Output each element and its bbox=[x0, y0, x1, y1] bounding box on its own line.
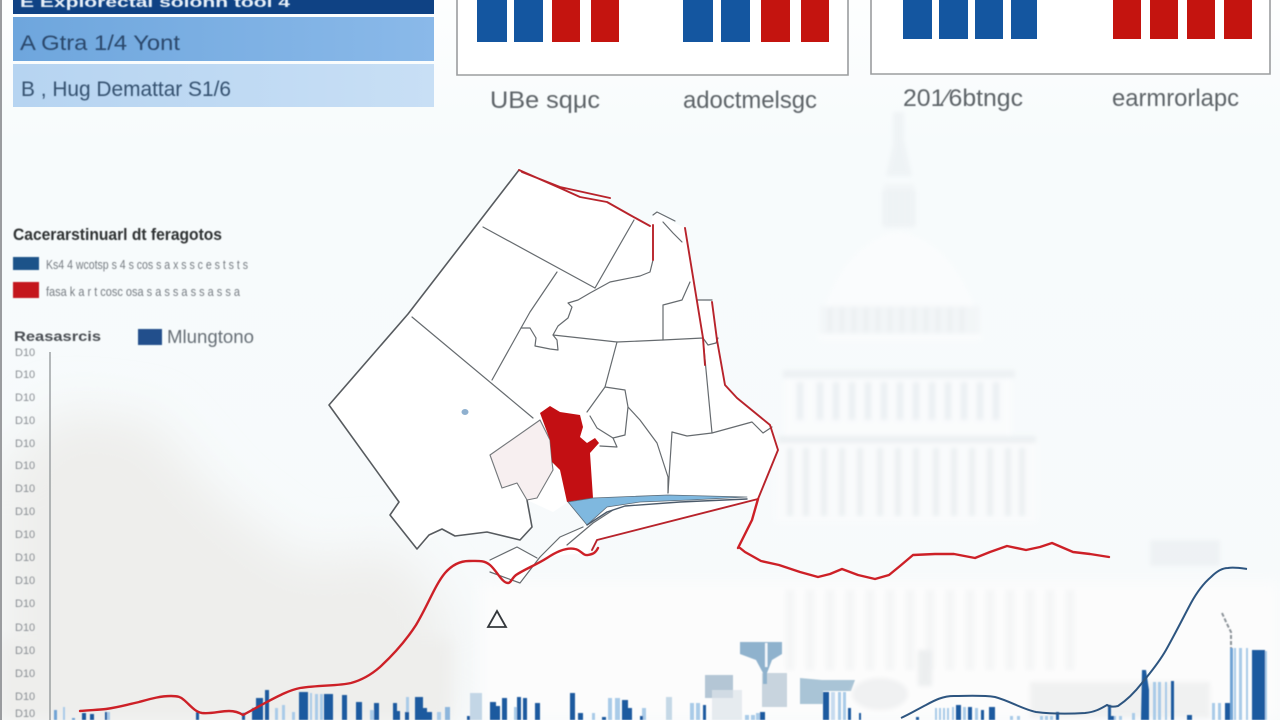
background: faint lower columns bbox=[790, 590, 1210, 718]
bar panel 1 bbox=[457, 0, 848, 75]
left page edge bbox=[0, 0, 2, 720]
y axis with tick labels: D10 bbox=[15, 622, 35, 634]
y axis with tick labels: D10 bbox=[15, 438, 35, 450]
background: capitol building bbox=[775, 112, 1220, 566]
chart legend bbox=[14, 327, 254, 347]
background: hazy trees bbox=[0, 410, 450, 720]
map: pink county bbox=[490, 420, 553, 500]
row A: mid blue bbox=[13, 17, 434, 61]
map: blue inlet bbox=[568, 495, 747, 525]
y axis with tick labels: D10 bbox=[15, 392, 35, 404]
y axis with tick labels: D10 bbox=[15, 552, 35, 564]
bar panel captions: 201⁄6btngc bbox=[903, 85, 1023, 112]
map: county borders bbox=[412, 212, 772, 583]
chart legend: Reasasrcis bbox=[14, 328, 101, 344]
bar chart: bottom bbox=[54, 613, 1267, 720]
header band: dark blue bbox=[13, 0, 434, 14]
y axis with tick labels: D10 bbox=[15, 369, 35, 381]
y axis with tick labels: D10 bbox=[15, 460, 35, 472]
triangle marker bbox=[488, 611, 506, 627]
chart legend: Mlungtono bbox=[167, 327, 254, 347]
y axis with tick labels bbox=[15, 347, 50, 720]
bar panel 2 bbox=[871, 0, 1270, 74]
y axis with tick labels: D10 bbox=[15, 483, 35, 495]
legend bbox=[13, 225, 248, 299]
thin dotted stem bbox=[1222, 613, 1231, 648]
blue trend line bbox=[901, 568, 1247, 718]
y axis with tick labels: D10 bbox=[15, 575, 35, 587]
map: red eastern boundary bbox=[519, 170, 778, 550]
row B: light blue bbox=[13, 64, 434, 107]
light bars bbox=[63, 648, 1267, 720]
y axis with tick labels: D10 bbox=[15, 529, 35, 541]
map: red county bbox=[540, 406, 599, 502]
bar panel captions: adoctmelsgc bbox=[683, 87, 817, 114]
y axis with tick labels: D10 bbox=[15, 415, 35, 427]
map: western boundary bbox=[329, 170, 532, 549]
dark bars bbox=[82, 650, 1265, 720]
bar panel captions: UBe sqμc bbox=[490, 87, 600, 114]
map: small lake bbox=[462, 409, 468, 415]
mid blue bars bbox=[54, 648, 1233, 720]
legend: Ks4 4 wcotsp s 4 s cos s a x s s c e s t s t s bbox=[46, 257, 248, 272]
bar panel captions: earmrorlapc bbox=[1112, 85, 1239, 112]
legend: fasa k a r t cosc osa s a s s a s s a s s a bbox=[46, 284, 241, 299]
y axis with tick labels: D10 bbox=[15, 347, 35, 359]
map: land fill bbox=[329, 170, 778, 549]
row B: light blue: B , Hug Demattar S1/6 bbox=[21, 78, 231, 101]
y axis with tick labels: D10 bbox=[15, 506, 35, 518]
background: faded blue blocks bbox=[705, 642, 908, 720]
row A: mid blue: A Gtra 1/4 Yont bbox=[20, 32, 180, 55]
y axis with tick labels: D10 bbox=[15, 691, 35, 703]
y axis with tick labels: D10 bbox=[15, 708, 35, 720]
bar panel captions bbox=[490, 85, 1239, 114]
y axis with tick labels: D10 bbox=[15, 645, 35, 657]
red trend line bbox=[80, 499, 1109, 715]
legend: Cacerarstinuarl dt feragotos bbox=[13, 225, 222, 244]
y axis with tick labels: D10 bbox=[15, 668, 35, 680]
background: capitol base haze bbox=[480, 582, 1280, 720]
map bbox=[329, 170, 778, 583]
y axis with tick labels: D10 bbox=[15, 598, 35, 610]
